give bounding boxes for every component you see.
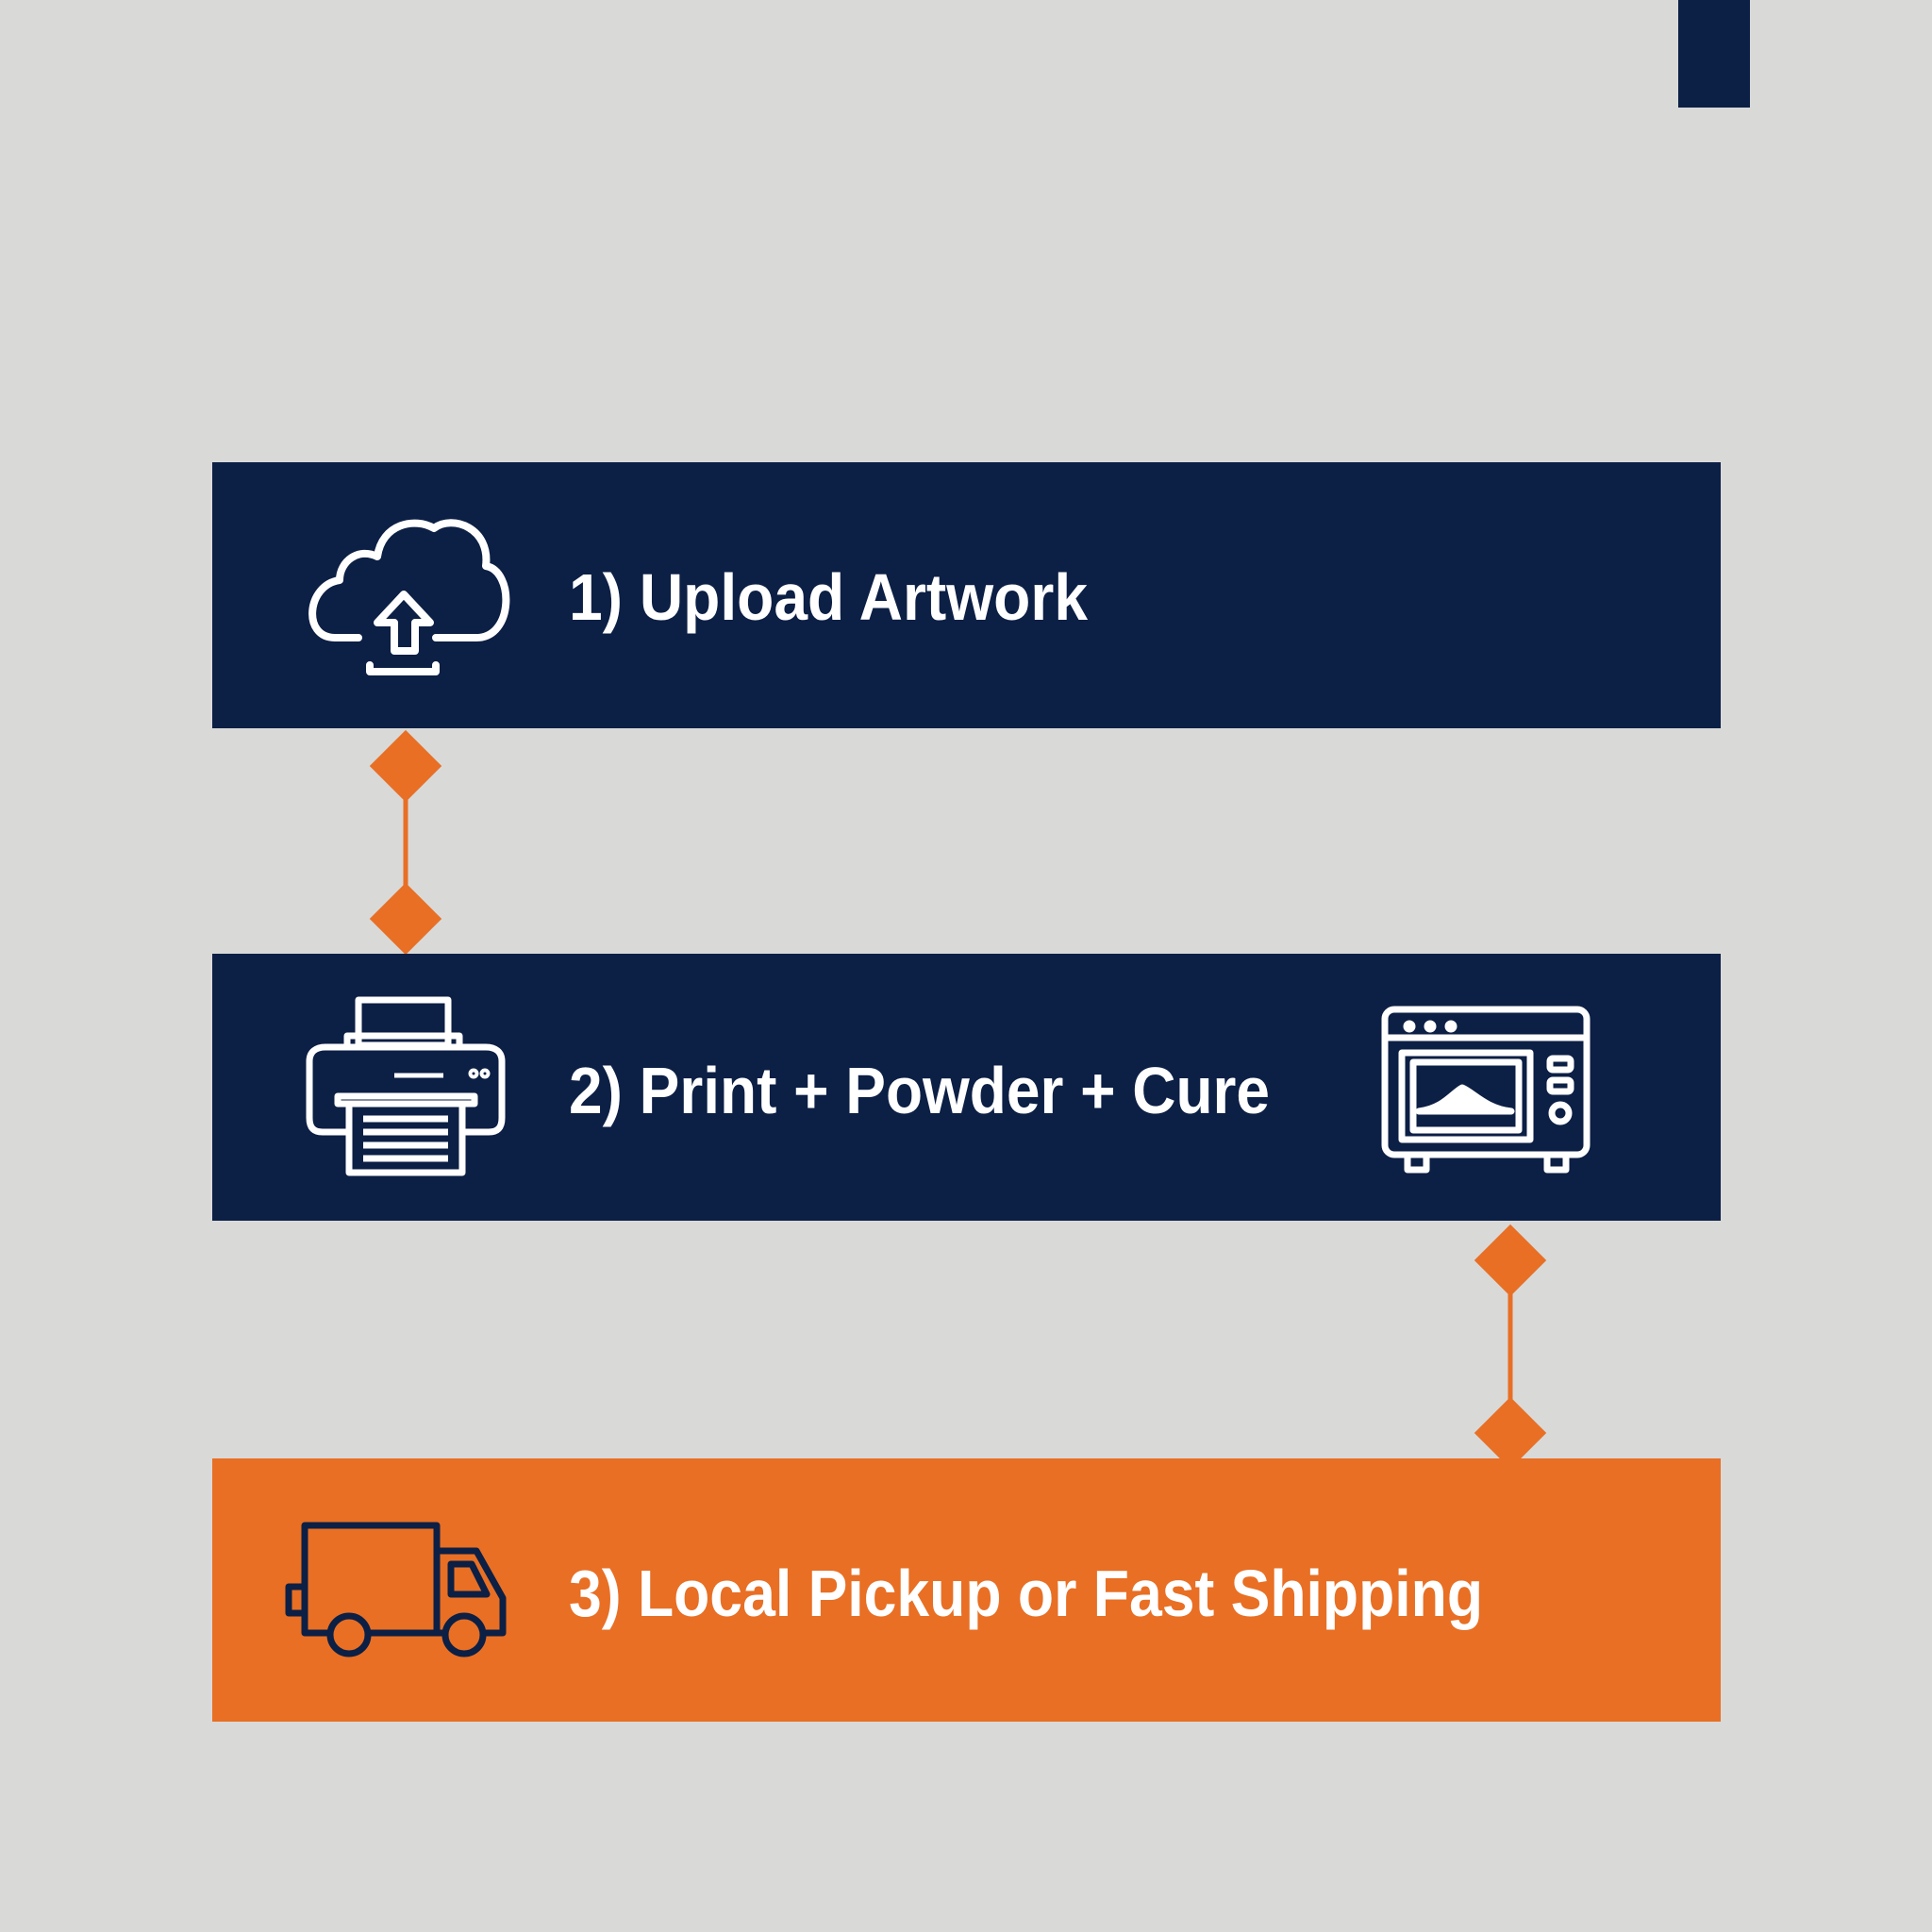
step 2 bar: Print + Powder + Cure	[212, 954, 1721, 1221]
icon: delivery truck	[289, 1525, 503, 1654]
top-right navy bar accent	[1678, 0, 1750, 108]
icon: cloud upload	[312, 523, 506, 672]
heading: 2) Print + Powder + Cure: 2) Print + Powder + Cure	[569, 1054, 1270, 1127]
heading: 1) Upload Artwork: 1) Upload Artwork	[569, 560, 1088, 634]
icon: curing oven	[1385, 1009, 1587, 1170]
connector 2	[1474, 1224, 1546, 1469]
step 3 bar: Local Pickup or Fast Shipping	[212, 1458, 1721, 1722]
icon: printer	[309, 1000, 502, 1173]
step 1 bar: Upload Artwork	[212, 462, 1721, 728]
connector 1	[370, 730, 441, 955]
heading: 3) Local Pickup or Fast Shipping: 3) Local Pickup or Fast Shipping	[569, 1557, 1483, 1630]
